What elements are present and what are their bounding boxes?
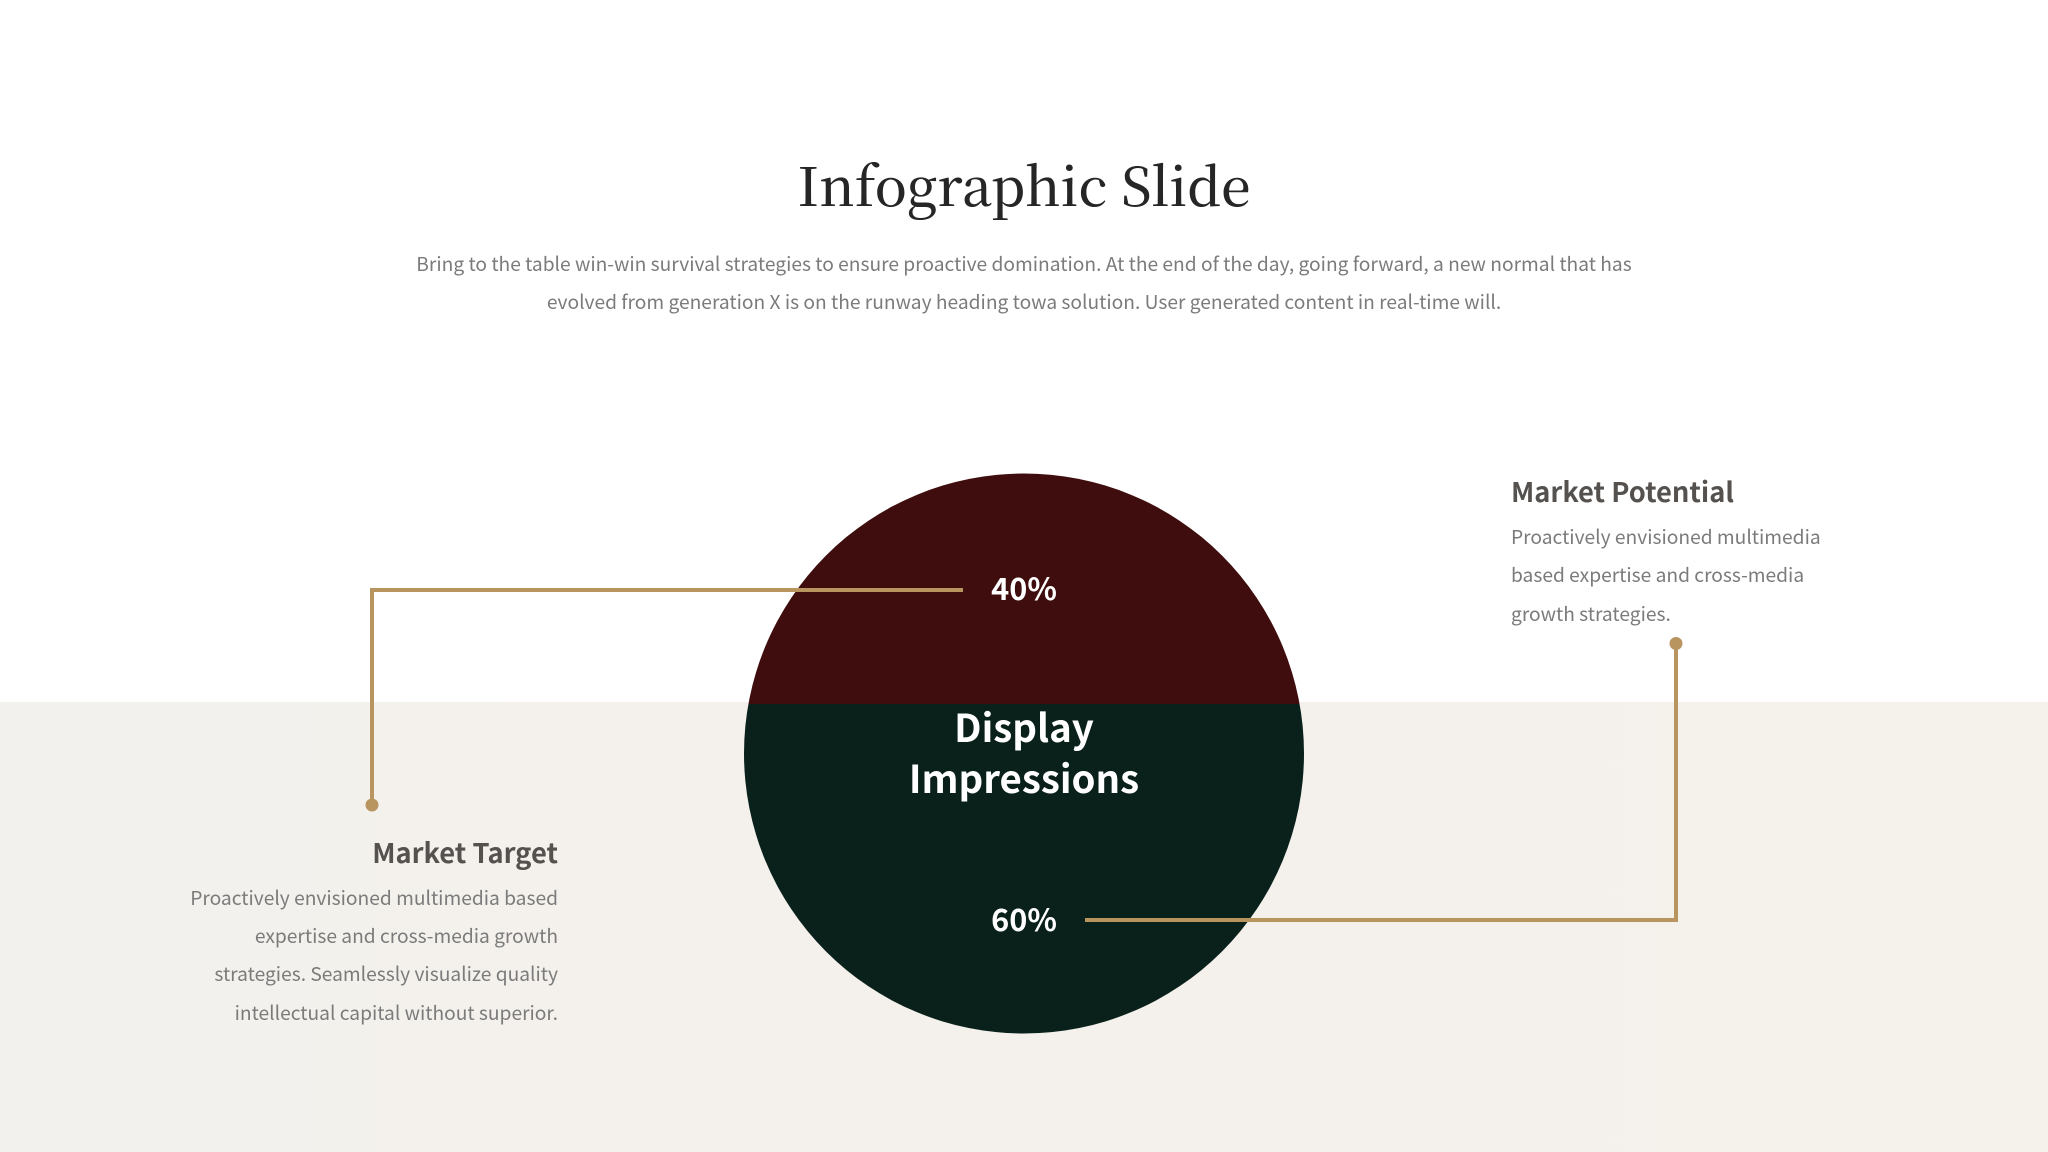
text: market target [190,882,558,1026]
text: market target: expertise and cross-media growth [255,921,558,949]
label: display impressions: Impressions [909,748,1139,804]
connector: market target [368,590,963,810]
label: display impressions: Display [954,698,1094,754]
text: market potential: based expertise and cross-media [1511,560,1804,588]
chart: display impressions circle with connectors [366,474,1682,1034]
label: 40%: 40% [991,564,1057,609]
text: market target: strategies. Seamlessly visualize quality [214,959,558,987]
intro text [416,249,1632,315]
text: market target: intellectual capital without superior. [235,998,558,1026]
title: Infographic Slide [797,146,1251,222]
panel: market potential [1511,470,1821,627]
circle segments [744,473,1304,1034]
label: 60%: 60% [991,895,1057,940]
text: market potential [1511,522,1821,627]
connector: market potential [1085,639,1680,920]
text: market target: Proactively envisioned multimedia based [190,882,558,910]
heading: market potential: Market Potential [1511,470,1734,510]
text: market potential: growth strategies. [1511,599,1671,627]
intro text: evolved from generation X is on the runway heading towa solution. User generated content in real-time will. [547,287,1501,315]
text: market potential: Proactively envisioned multimedia [1511,522,1821,550]
heading: market target: Market Target [372,830,558,870]
background band [0,702,2048,1152]
label: display impressions [909,698,1139,804]
panel: market target [190,830,558,1026]
intro text: Bring to the table win-win survival strategies to ensure proactive domination. At the end of the day, going forward, a new normal that has [416,249,1632,277]
